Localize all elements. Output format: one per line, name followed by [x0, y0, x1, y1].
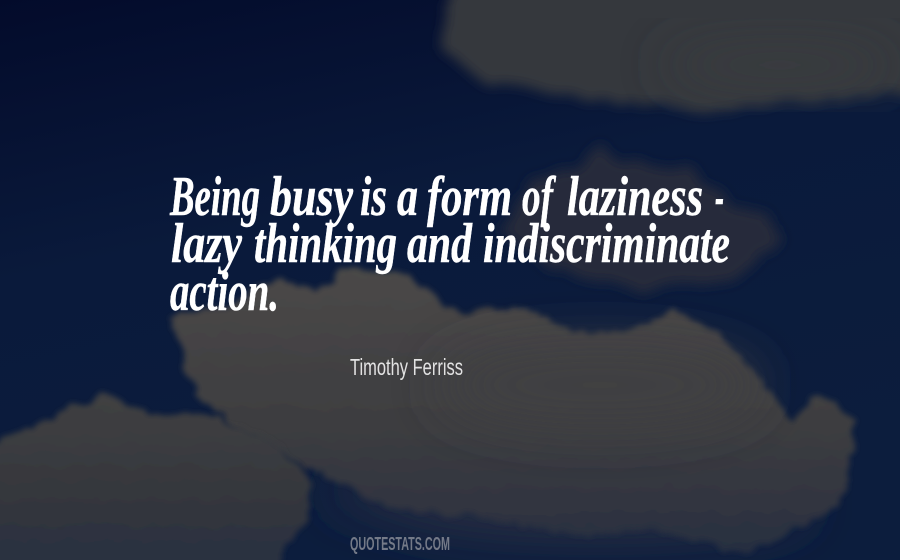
- quote text: lazy: [171, 213, 243, 275]
- quote text: [169, 166, 730, 323]
- quote text: laziness: [567, 166, 703, 228]
- quote text: busy: [270, 166, 354, 228]
- cloud: lower wash under the centre cloud: [330, 472, 810, 535]
- quote text: of: [522, 166, 557, 228]
- source watermark: QUOTESTATS.COM: [350, 534, 450, 554]
- quote text: thinking: [254, 213, 397, 275]
- cloud: large centre: [172, 268, 855, 552]
- quote text: and: [407, 213, 473, 275]
- quote text: Being: [169, 166, 260, 228]
- quote text: -: [715, 166, 724, 228]
- quote text: is: [360, 166, 387, 228]
- quote text: a: [397, 166, 418, 228]
- quote text: indiscriminate: [483, 213, 730, 275]
- quote text: form: [427, 166, 512, 228]
- cloud: bottom left: [0, 393, 313, 560]
- quote text: action.: [170, 261, 279, 323]
- cloud: top right: [440, 0, 900, 113]
- author name: Timothy Ferriss: [350, 354, 463, 380]
- cloud: faint middle right: [500, 143, 783, 290]
